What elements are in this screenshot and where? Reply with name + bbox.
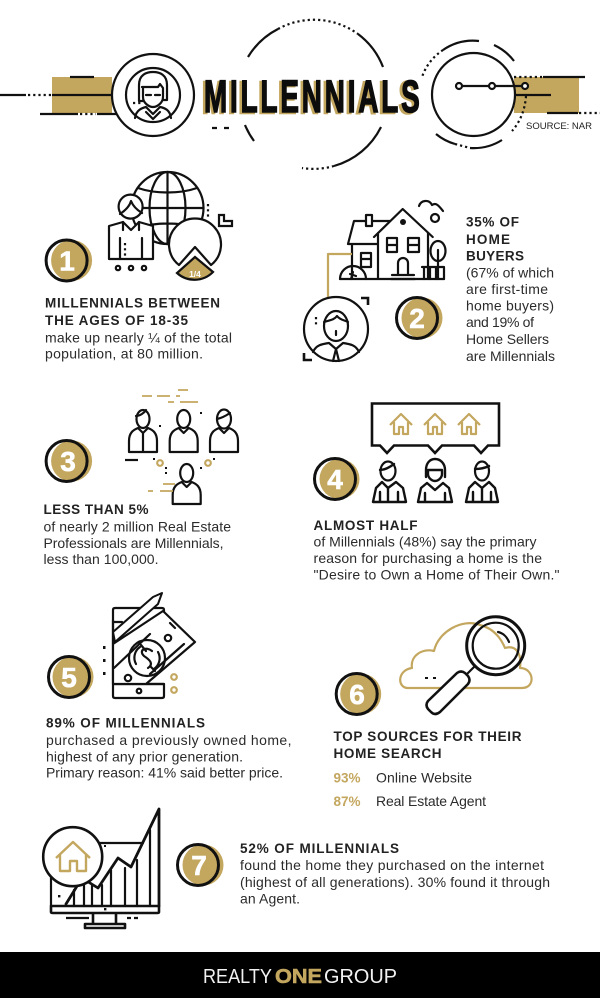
text 4: ALMOST HALF xyxy=(314,518,418,533)
text 2: Home Sellers xyxy=(466,331,549,347)
badge 4: 4 xyxy=(327,464,343,495)
text 1: population, at 80 million. xyxy=(45,346,203,362)
text 2: are Millennials xyxy=(466,348,555,364)
text 6: Online Website xyxy=(376,770,472,786)
badge 1: 1 xyxy=(59,246,75,276)
badge 6 xyxy=(336,674,381,714)
text 2: home buyers) xyxy=(466,298,554,314)
left header lines xyxy=(0,77,130,114)
icon: phone with money and pencil xyxy=(103,593,195,698)
person xyxy=(418,459,452,502)
person xyxy=(466,462,498,502)
text 7: found the home they purchased on the internet xyxy=(240,857,544,873)
icon: speech bubble with houses xyxy=(372,404,499,453)
right header lines xyxy=(514,77,600,113)
icon: three people xyxy=(373,459,498,502)
badge 4 xyxy=(314,458,360,500)
icon: globe, person and pie: 1/4 xyxy=(189,269,201,279)
person xyxy=(173,464,201,504)
large broken circle xyxy=(212,20,383,169)
right gold block xyxy=(514,77,579,113)
badge 3: 3 xyxy=(60,446,76,477)
gold rings xyxy=(157,460,163,466)
header xyxy=(0,20,600,169)
badge 6: 6 xyxy=(349,679,365,710)
gold house xyxy=(458,414,480,434)
gold dashes xyxy=(142,390,198,491)
text 5: highest of any prior generation. xyxy=(46,748,243,764)
badge 1 xyxy=(46,240,92,281)
text 7 xyxy=(240,841,550,906)
title: MILLENNIALS xyxy=(202,73,417,124)
text 6 xyxy=(334,729,522,809)
text 2: are first-time xyxy=(466,281,548,297)
text 2: 35% OF xyxy=(466,214,519,230)
badge 2: 2 xyxy=(409,303,425,334)
section 7: found online xyxy=(43,809,550,928)
text 4: "Desire to Own a Home of Their Own." xyxy=(314,566,560,582)
text 7: (highest of all generations). 30% found it through xyxy=(240,874,550,890)
text 1 xyxy=(45,296,232,362)
text 4 xyxy=(314,518,560,582)
icon: house xyxy=(340,201,446,279)
icon: four people xyxy=(125,390,238,504)
text 7: an Agent. xyxy=(240,890,300,906)
icon: monitor with chart and house xyxy=(43,809,159,928)
text 1: MILLENNIALS BETWEEN xyxy=(45,296,220,310)
title: MILLENNIALS xyxy=(204,71,420,122)
badge 5 xyxy=(48,656,94,698)
logo xyxy=(203,965,397,988)
text 6: HOME SEARCH xyxy=(334,746,442,761)
text 3: less than 100,000. xyxy=(44,551,158,567)
text 2 xyxy=(466,214,555,364)
section 6: top sources xyxy=(334,617,532,809)
text 2: BUYERS xyxy=(466,248,524,264)
text 4: of Millennials (48%) say the primary xyxy=(314,534,536,550)
text 2: HOME xyxy=(466,232,510,247)
text 5: Primary reason: 41% said better price. xyxy=(46,764,283,780)
text 2: and 19% of xyxy=(466,314,534,330)
section 3: real estate professionals xyxy=(44,390,238,567)
source note: SOURCE: NAR xyxy=(526,121,592,132)
section 5: previously owned home xyxy=(46,593,292,780)
text 1: THE AGES OF 18-35 xyxy=(45,313,188,328)
section 1: population xyxy=(45,172,232,362)
icon: man in circle xyxy=(304,297,368,361)
icon: woman in circle xyxy=(112,54,194,136)
text 7: 52% OF MILLENNIALS xyxy=(240,841,399,856)
badge 2 xyxy=(396,298,442,338)
badge 3 xyxy=(46,440,92,482)
text 6: Real Estate Agent xyxy=(376,793,486,809)
icon: timeline in circle xyxy=(422,41,528,148)
person xyxy=(170,410,198,452)
text 2: (67% of which xyxy=(466,264,554,280)
person xyxy=(210,410,238,452)
text 5: purchased a previously owned home, xyxy=(46,732,292,748)
footer bar xyxy=(0,952,600,998)
text 3: Professionals are Millennials, xyxy=(44,535,224,551)
text 4: reason for purchasing a home is the xyxy=(314,550,542,566)
gold house xyxy=(424,414,446,434)
connector line xyxy=(328,254,352,297)
badge 7 xyxy=(178,844,224,886)
small dots xyxy=(153,412,215,474)
icon: globe, person and pie xyxy=(109,172,232,280)
section 4: desire to own xyxy=(314,404,560,582)
logo: REALTY xyxy=(203,965,272,988)
text 5 xyxy=(46,716,292,780)
section 2: home buyers xyxy=(304,201,555,364)
text 6: TOP SOURCES FOR THEIR xyxy=(334,729,522,744)
text 3 xyxy=(44,502,231,567)
logo: GROUP xyxy=(324,965,397,988)
badge 7: 7 xyxy=(191,850,207,881)
person xyxy=(129,410,157,452)
gold house xyxy=(390,414,412,434)
text 6: 93% xyxy=(334,770,360,786)
left gold block xyxy=(52,77,112,113)
logo: ONE xyxy=(275,965,322,988)
text 5: 89% OF MILLENNIALS xyxy=(46,716,205,730)
text 3: of nearly 2 million Real Estate xyxy=(44,518,231,534)
badge 5: 5 xyxy=(61,662,77,693)
person xyxy=(373,462,406,502)
text 6: 87% xyxy=(334,794,360,809)
text 1: make up nearly ¼ of the total xyxy=(45,330,232,346)
text 3: LESS THAN 5% xyxy=(44,502,148,517)
icon: cloud with magnifying glass xyxy=(400,617,532,714)
